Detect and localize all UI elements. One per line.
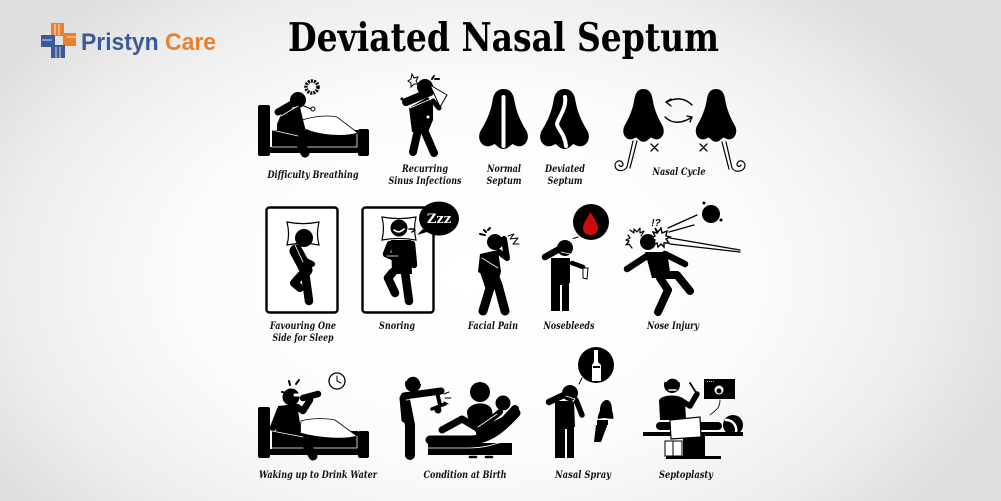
label: deviated septum: Deviated	[544, 163, 586, 175]
label: nose injury: Nose Injury	[646, 320, 700, 332]
icon: nasal cycle	[615, 89, 745, 171]
label: nasal spray: Nasal Spray	[554, 469, 612, 481]
label: normal septum	[486, 163, 522, 187]
icon: nasal spray	[549, 347, 614, 458]
icon: logo cross	[41, 23, 76, 58]
icon: waking up to drink water	[258, 373, 369, 458]
logo: Pristyn Care	[41, 23, 216, 58]
icon: normal septum	[479, 89, 528, 149]
text: Zzz: Zzz	[427, 212, 451, 227]
text: exclamation: !?	[651, 218, 661, 229]
icon: nose injury	[626, 202, 740, 312]
label: normal septum: Normal	[486, 163, 521, 175]
label: nosebleeds: Nosebleeds	[543, 320, 595, 332]
label: normal septum: Septum	[486, 175, 522, 187]
label: condition at birth: Condition at Birth	[424, 469, 506, 481]
label: recurring sinus infections: Sinus Infections	[388, 175, 462, 187]
label: deviated septum: Septum	[548, 175, 582, 187]
label: difficulty breathing: Difficulty Breathing	[267, 169, 358, 181]
icon: septoplasty	[643, 377, 743, 459]
label: favouring one side for sleep	[269, 320, 336, 344]
label: waking up to drink water: Waking up to Drink Water	[259, 469, 378, 481]
label: favouring one side for sleep: Side for Sleep	[272, 332, 334, 344]
icon: recurring sinus infections	[400, 74, 447, 153]
logo wordmark: Pristyn Care	[81, 29, 216, 56]
label: favouring one side for sleep: Favouring One	[269, 320, 336, 332]
label: recurring sinus infections	[388, 163, 462, 187]
icon: favouring one side for sleep	[266, 208, 338, 312]
icon: facial pain	[478, 228, 519, 311]
label: deviated septum	[544, 163, 586, 187]
icon: condition at birth	[402, 376, 516, 457]
icon: nosebleeds	[545, 204, 609, 311]
label: recurring sinus infections: Recurring	[401, 163, 448, 175]
title: Deviated Nasal Septum	[288, 15, 719, 61]
label: facial pain: Facial Pain	[467, 320, 518, 332]
icon: deviated septum	[540, 89, 589, 149]
icon: difficulty breathing	[258, 81, 369, 156]
label: nasal cycle: Nasal Cycle	[652, 166, 706, 178]
label: septoplasty: Septoplasty	[659, 469, 714, 481]
icon: snoring	[362, 202, 459, 312]
label: snoring: Snoring	[379, 320, 415, 332]
